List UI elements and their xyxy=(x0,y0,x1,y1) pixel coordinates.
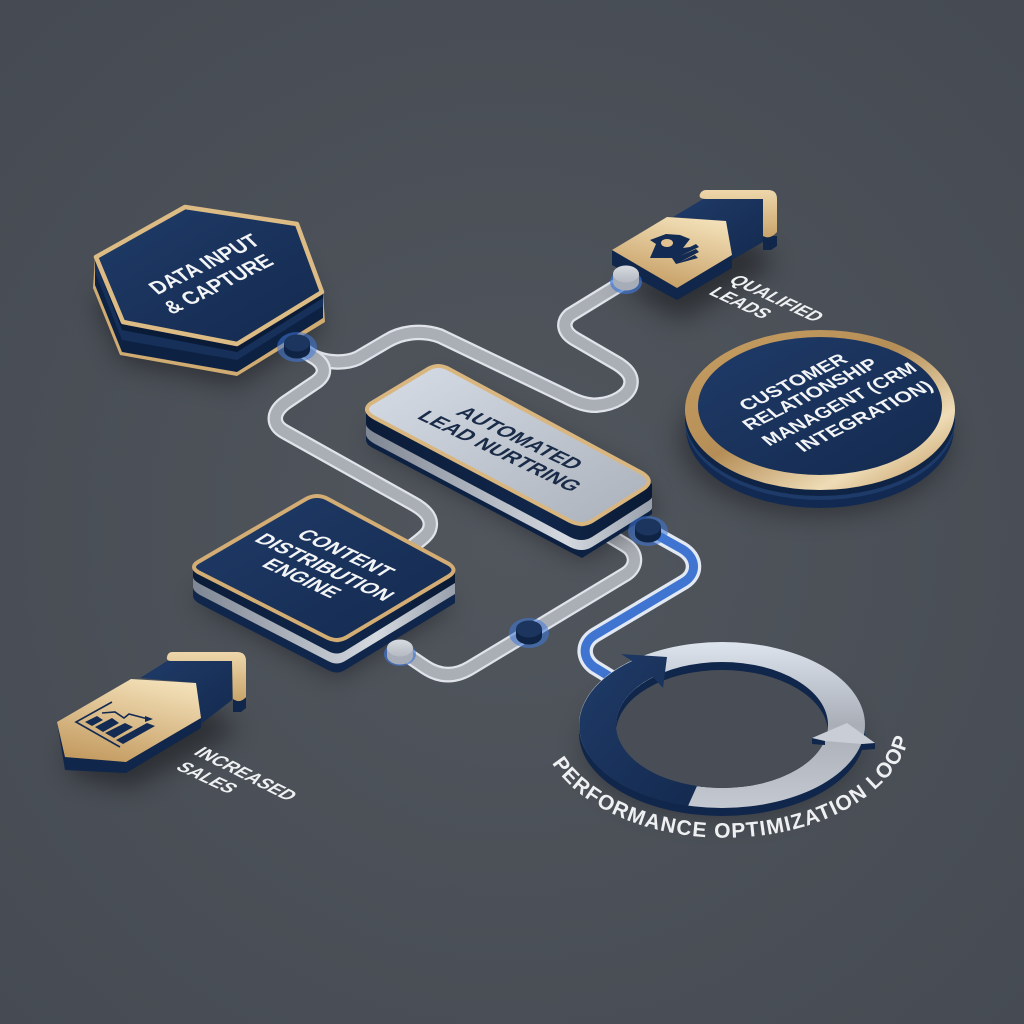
rounded top plate xyxy=(367,366,649,524)
icon: leads badge xyxy=(650,234,699,264)
pipe: data input to qualified leads xyxy=(300,280,631,405)
text: engine: ENGINE xyxy=(256,556,347,601)
arrow shaft xyxy=(140,661,232,724)
silver ring xyxy=(579,642,865,808)
pipe: automated nurturing to content distribution xyxy=(400,530,635,675)
text: distribution: DISTRIBUTION xyxy=(249,530,400,604)
connector pipes xyxy=(275,280,694,686)
panel: increased sales arrow xyxy=(57,652,303,804)
text: integration: INTEGRATION) xyxy=(791,377,938,456)
node: data input xyxy=(277,332,317,362)
text: relationship: RELATIONSHIP xyxy=(738,355,883,434)
text: managent crm: MANAGENT (CRM xyxy=(757,359,921,449)
panel: content distribution engine xyxy=(193,496,455,678)
label: leads: LEADS xyxy=(704,284,777,322)
silver arrow head xyxy=(812,723,875,750)
gold rim xyxy=(685,330,955,490)
label: increased: INCREASED xyxy=(189,744,303,804)
node: automated output xyxy=(628,516,668,546)
node: qualified leads xyxy=(610,266,642,294)
text: loop label: PERFORMANCE OPTIMIZATION LOOP xyxy=(552,736,906,838)
text: automated: AUTOMATED xyxy=(450,404,588,473)
node: content distribution xyxy=(384,640,416,666)
gold hexagon top xyxy=(57,679,201,762)
panel: automated lead nurturing xyxy=(366,366,655,560)
node: return path xyxy=(509,618,549,648)
arrow shaft xyxy=(673,199,763,260)
text: lead nurturing: LEAD NURTRING xyxy=(412,408,587,495)
panel: data input and capture xyxy=(93,207,325,386)
panel: customer relationship management xyxy=(680,330,955,515)
pipe: blue link to optimization loop xyxy=(585,530,694,686)
heading: data input: DATA INPUT xyxy=(144,230,265,299)
rounded top plate xyxy=(194,496,454,640)
hexagon top xyxy=(96,207,322,344)
text: customer: CUSTOMER xyxy=(735,351,853,415)
gold pentagon top xyxy=(612,217,732,288)
chart: performance optimization loop xyxy=(552,642,906,838)
icon: sales chart xyxy=(76,702,155,747)
arrow gold corner xyxy=(167,652,246,701)
label: qualified: QUALIFIED xyxy=(724,272,830,325)
arrow gold corner xyxy=(700,190,777,237)
pipe: data input to content distribution xyxy=(275,356,430,552)
heading: and capture: & CAPTURE xyxy=(158,250,279,319)
navy arrow arc xyxy=(579,654,697,806)
panel: qualified leads arrow xyxy=(612,190,830,325)
text: content: CONTENT xyxy=(291,526,400,581)
label: sales: SALES xyxy=(171,759,243,796)
